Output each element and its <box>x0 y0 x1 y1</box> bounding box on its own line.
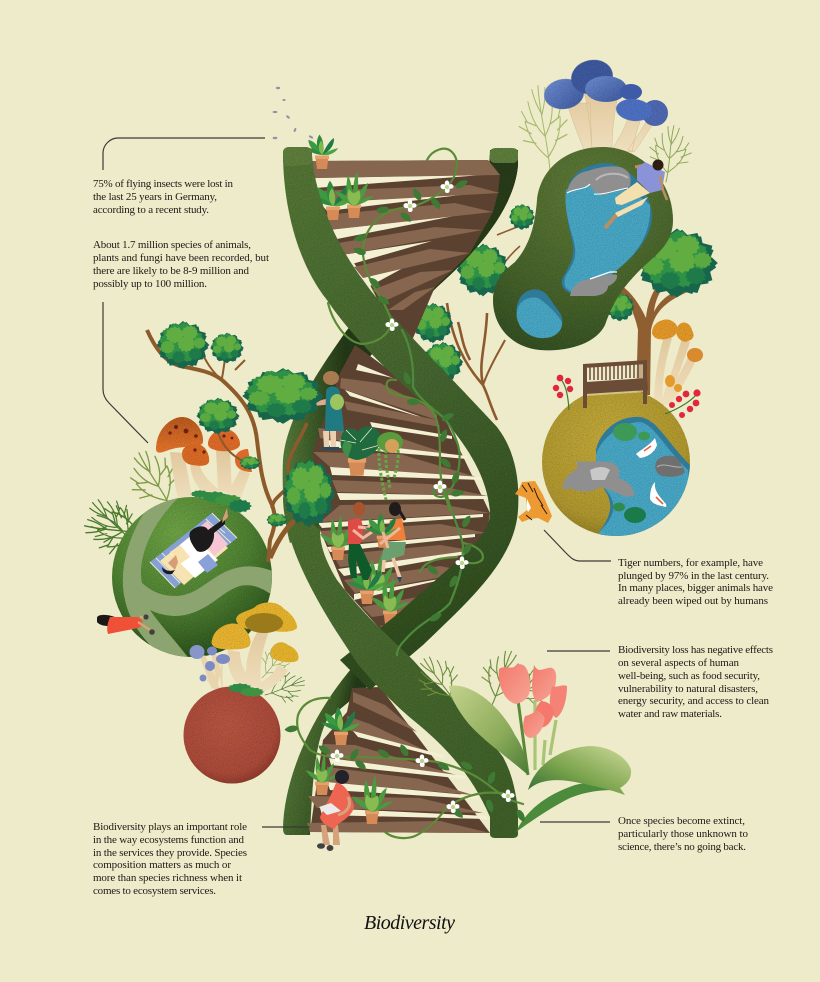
red ball <box>184 686 280 784</box>
text: loss: well-being, such as food security, <box>618 670 760 682</box>
text: species: About 1.7 million species of animals, <box>93 239 251 251</box>
leader line: insects <box>103 138 265 170</box>
vine flowers <box>330 180 514 813</box>
tulip stem main <box>518 700 528 775</box>
text: tigers: In many places, bigger animals have <box>618 582 773 594</box>
text: loss: vulnerability to natural disasters, <box>618 683 758 695</box>
text: ecosystem: in the way ecosystems function and <box>93 834 244 846</box>
text: extinct: particularly those unknown to <box>618 828 748 840</box>
vine inner strand <box>387 380 450 510</box>
green ball <box>112 495 275 665</box>
text: insects: according to a recent study. <box>93 204 209 216</box>
olive ball with pond <box>542 320 703 560</box>
vine middle <box>397 330 463 655</box>
text: loss: on several aspects of human <box>618 657 740 669</box>
reading woman <box>317 770 354 851</box>
moss on red ball <box>228 683 264 697</box>
text: insects: 75% of flying insects were lost in <box>93 178 234 190</box>
vine tendril <box>420 543 483 572</box>
koi fish <box>636 438 666 507</box>
red ball with yellow mushrooms <box>184 603 310 784</box>
text: species: plants and fungi have been recorded, but <box>93 252 269 264</box>
strand back top upper dark <box>380 150 518 325</box>
berries sprig right <box>665 389 701 418</box>
orange mushrooms <box>156 417 252 500</box>
text: species <box>93 239 269 290</box>
text: insects: the last 25 years in Germany, <box>93 191 217 203</box>
person floating <box>605 160 667 228</box>
tulip leaf left <box>449 686 528 775</box>
water on blob <box>564 185 650 293</box>
steps: lower section <box>307 687 490 833</box>
leader line: ecosystem <box>262 826 310 828</box>
flying insects <box>273 87 314 139</box>
small blue mushrooms <box>190 645 230 690</box>
text: species: there are likely to be 8-9 million and <box>93 265 250 277</box>
monstera plant <box>340 426 381 476</box>
green blob island <box>493 147 673 350</box>
vine upper <box>328 149 457 344</box>
text: ecosystem: in the services they provide. Species <box>93 847 247 859</box>
rocks top <box>567 166 631 195</box>
couple with plant <box>348 502 406 583</box>
text: tigers: Tiger numbers, for example, have <box>618 557 763 569</box>
tulip leaf lower <box>516 783 622 832</box>
text: extinct <box>618 815 748 853</box>
text: loss <box>618 644 773 720</box>
text: ecosystem: Biodiversity plays an important role <box>93 821 247 833</box>
leader line: extinct <box>540 821 610 823</box>
pond on blob <box>562 163 652 293</box>
person lying on blanket <box>162 508 228 574</box>
title: Biodiversity <box>364 912 455 934</box>
text: tigers: plunged by 97% in the last century. <box>618 570 769 582</box>
moss on green ball <box>190 490 252 513</box>
text: loss: water and raw materials. <box>618 708 722 720</box>
small pond on blob <box>516 289 562 338</box>
tulip <box>408 644 631 832</box>
water on olive ball <box>596 422 689 536</box>
leader line: loss <box>547 650 610 652</box>
berries sprig left <box>553 375 573 410</box>
text: tigers <box>618 557 773 607</box>
bench <box>583 360 648 408</box>
fern: yellow mushrooms upper <box>251 639 298 687</box>
text: ecosystem: more than species richness when it <box>93 872 242 884</box>
text: tigers: already been wiped out by humans <box>618 595 768 607</box>
left tree and mushrooms group <box>77 318 338 784</box>
rocks bottom <box>570 272 617 296</box>
tiger <box>515 481 552 523</box>
strand front upper <box>283 147 518 690</box>
fern: blue mushrooms <box>514 82 695 185</box>
vines <box>284 149 526 838</box>
vine bottom <box>385 793 503 838</box>
text: loss: Biodiversity loss has negative effects <box>618 644 773 656</box>
olive ball <box>542 388 690 536</box>
hanging plant <box>377 432 403 500</box>
tulip stems <box>535 700 556 770</box>
potted plants: lower <box>306 707 393 824</box>
strand cap top left <box>283 147 312 166</box>
text: loss: energy security, and access to clean <box>618 695 770 707</box>
tree: behind blob with bench trunk <box>604 224 721 395</box>
woman picking from tree <box>313 371 344 450</box>
steps: middle section <box>313 345 490 640</box>
vine lower <box>297 698 523 804</box>
text: insects <box>93 178 234 216</box>
potted plants: middle <box>320 515 410 624</box>
strand cap top right <box>490 148 518 163</box>
tulip flowers <box>499 664 567 738</box>
person walking in red <box>97 614 155 635</box>
fern: behind tulip <box>408 644 560 715</box>
text: extinct: science, there’s no going back. <box>618 841 746 853</box>
leader line: tiger <box>544 530 611 561</box>
olive mushrooms <box>652 320 703 405</box>
pond on olive ball <box>596 416 690 536</box>
steps: top section <box>312 160 500 345</box>
text: ecosystem: comes to ecosystem services. <box>93 885 216 897</box>
text: ecosystem <box>93 821 247 897</box>
yellow mushrooms <box>211 603 299 692</box>
tree: behind helix right <box>411 202 536 420</box>
blue mushrooms <box>542 56 668 152</box>
strand back top <box>283 150 518 543</box>
text: ecosystem: composition matters as much or <box>93 859 231 871</box>
left tree <box>147 318 338 562</box>
leader line: species <box>103 302 148 443</box>
tulip leaf right <box>528 746 631 795</box>
fern: behind orange mushrooms left <box>77 441 193 561</box>
text: species: possibly up to 100 million. <box>93 278 207 290</box>
rocks on olive pond <box>563 456 685 497</box>
potted plants: top <box>305 135 374 220</box>
fern: yellow mushrooms <box>260 666 310 709</box>
text: extinct: Once species become extinct, <box>618 815 745 827</box>
vine leaves <box>284 179 526 822</box>
strand back bottom <box>283 662 375 835</box>
strand front lower <box>283 497 518 838</box>
lily pads <box>613 423 650 523</box>
picnic blanket <box>150 513 237 588</box>
